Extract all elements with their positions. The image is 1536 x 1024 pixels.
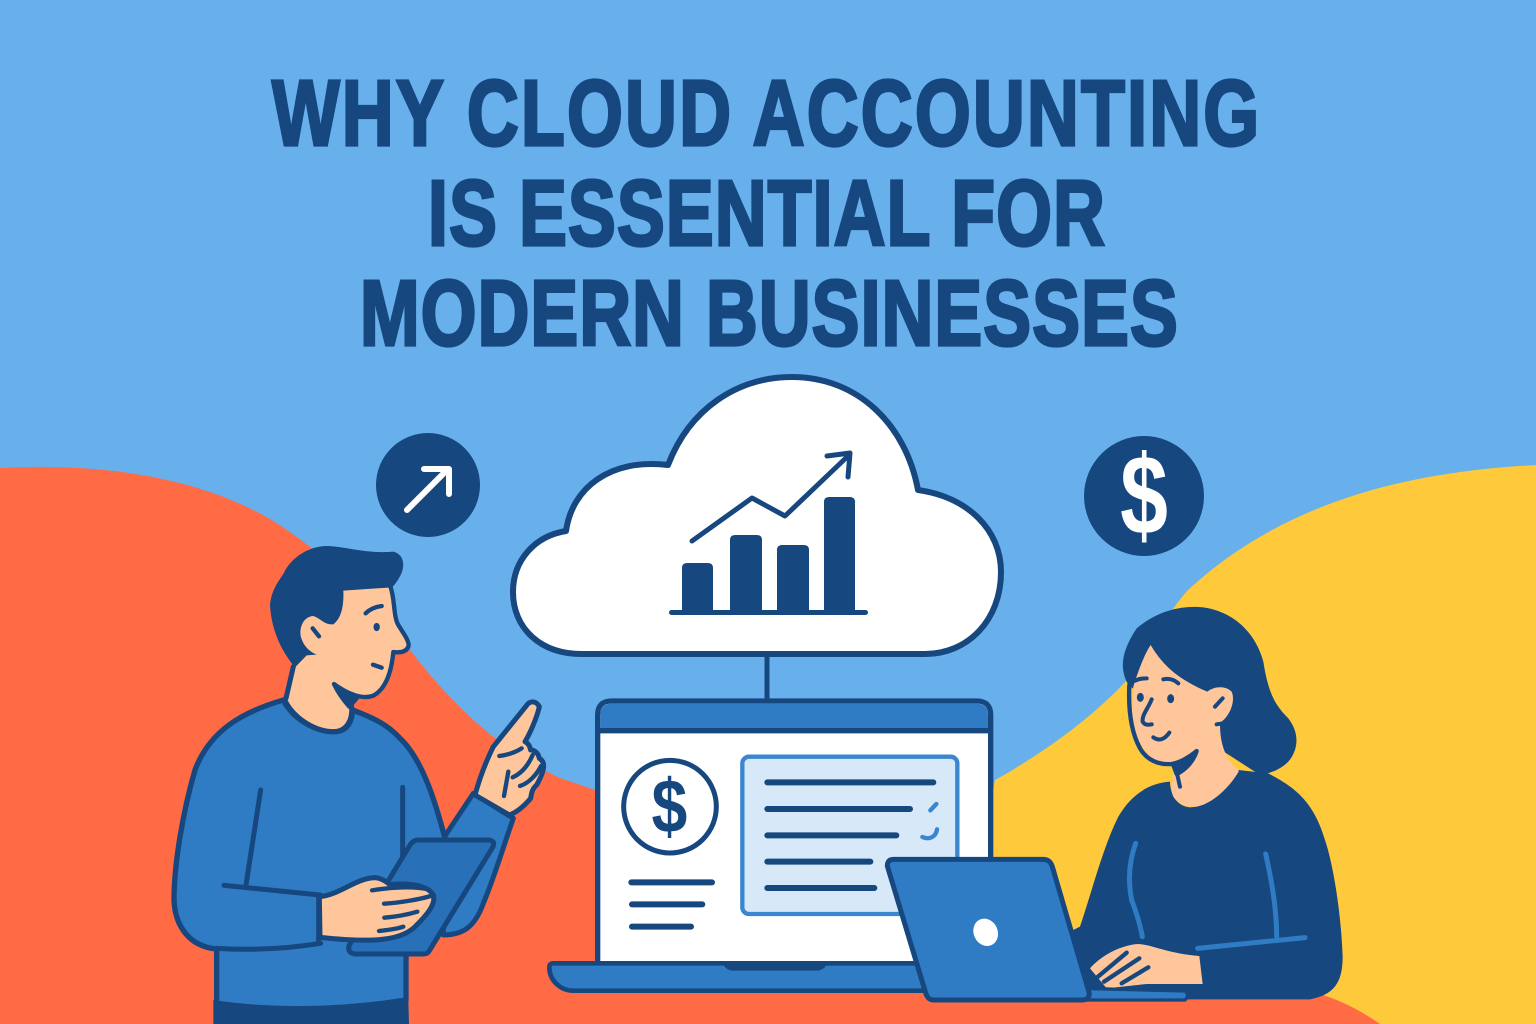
man: face bbox=[300, 580, 409, 697]
man: tablet bbox=[349, 840, 494, 954]
woman: neck bbox=[1172, 723, 1239, 807]
man: far arm sleeve bbox=[443, 793, 513, 935]
woman: keyboard base bbox=[1080, 988, 1187, 1000]
man: neck bbox=[287, 643, 360, 732]
icon: dollar badge: $ bbox=[1120, 433, 1168, 559]
man with tablet bbox=[174, 546, 544, 1024]
cloud with growth chart bbox=[513, 377, 1001, 654]
woman with laptop bbox=[887, 607, 1343, 1000]
woman: eyes, brows, nose, smile, ear mark bbox=[1135, 678, 1223, 787]
large laptop with accounting dashboard bbox=[549, 701, 991, 991]
man: eye, brow, mouth and ear mark bbox=[313, 606, 382, 668]
laptop screen bbox=[598, 701, 991, 965]
chart bars bbox=[669, 497, 868, 615]
background: yellow wave bbox=[950, 465, 1536, 1024]
woman: jaw outline and neck shadow bbox=[1129, 685, 1197, 774]
left text lines bbox=[631, 882, 712, 927]
icon: dollar badge bbox=[1084, 433, 1204, 559]
title bbox=[272, 61, 1259, 365]
man: hair bbox=[270, 546, 403, 667]
man: holding hand bbox=[217, 878, 434, 949]
woman: hair back bbox=[1123, 607, 1296, 775]
man: ear bbox=[300, 615, 327, 655]
man: sweater fold lines bbox=[224, 787, 403, 895]
background: orange wave bbox=[0, 467, 1380, 1024]
icon: growth arrow badge bbox=[376, 433, 480, 537]
laptop logo bbox=[969, 915, 1002, 950]
connector: cloud to laptop bbox=[764, 652, 770, 702]
dollar coin icon bbox=[624, 760, 716, 853]
woman: face bbox=[1132, 645, 1233, 764]
man: face outline bbox=[334, 587, 409, 707]
man: trousers bbox=[213, 1000, 409, 1024]
man: raised hand bbox=[475, 702, 544, 815]
chart trend arrow bbox=[692, 453, 850, 541]
woman: sweater fold lines bbox=[1130, 843, 1305, 948]
dollar coin icon: $ bbox=[651, 763, 687, 848]
woman: typing hand bbox=[1090, 944, 1203, 988]
small laptop lid bbox=[887, 859, 1089, 1000]
woman: sweater body bbox=[1073, 770, 1343, 999]
title: WHY CLOUD ACCOUNTING bbox=[272, 61, 1259, 165]
laptop base bbox=[549, 963, 937, 991]
report panel bbox=[742, 757, 957, 914]
title: IS ESSENTIAL FOR bbox=[428, 161, 1105, 265]
man: sweater torso and arm bbox=[174, 700, 445, 1009]
title: MODERN BUSINESSES bbox=[360, 261, 1178, 365]
